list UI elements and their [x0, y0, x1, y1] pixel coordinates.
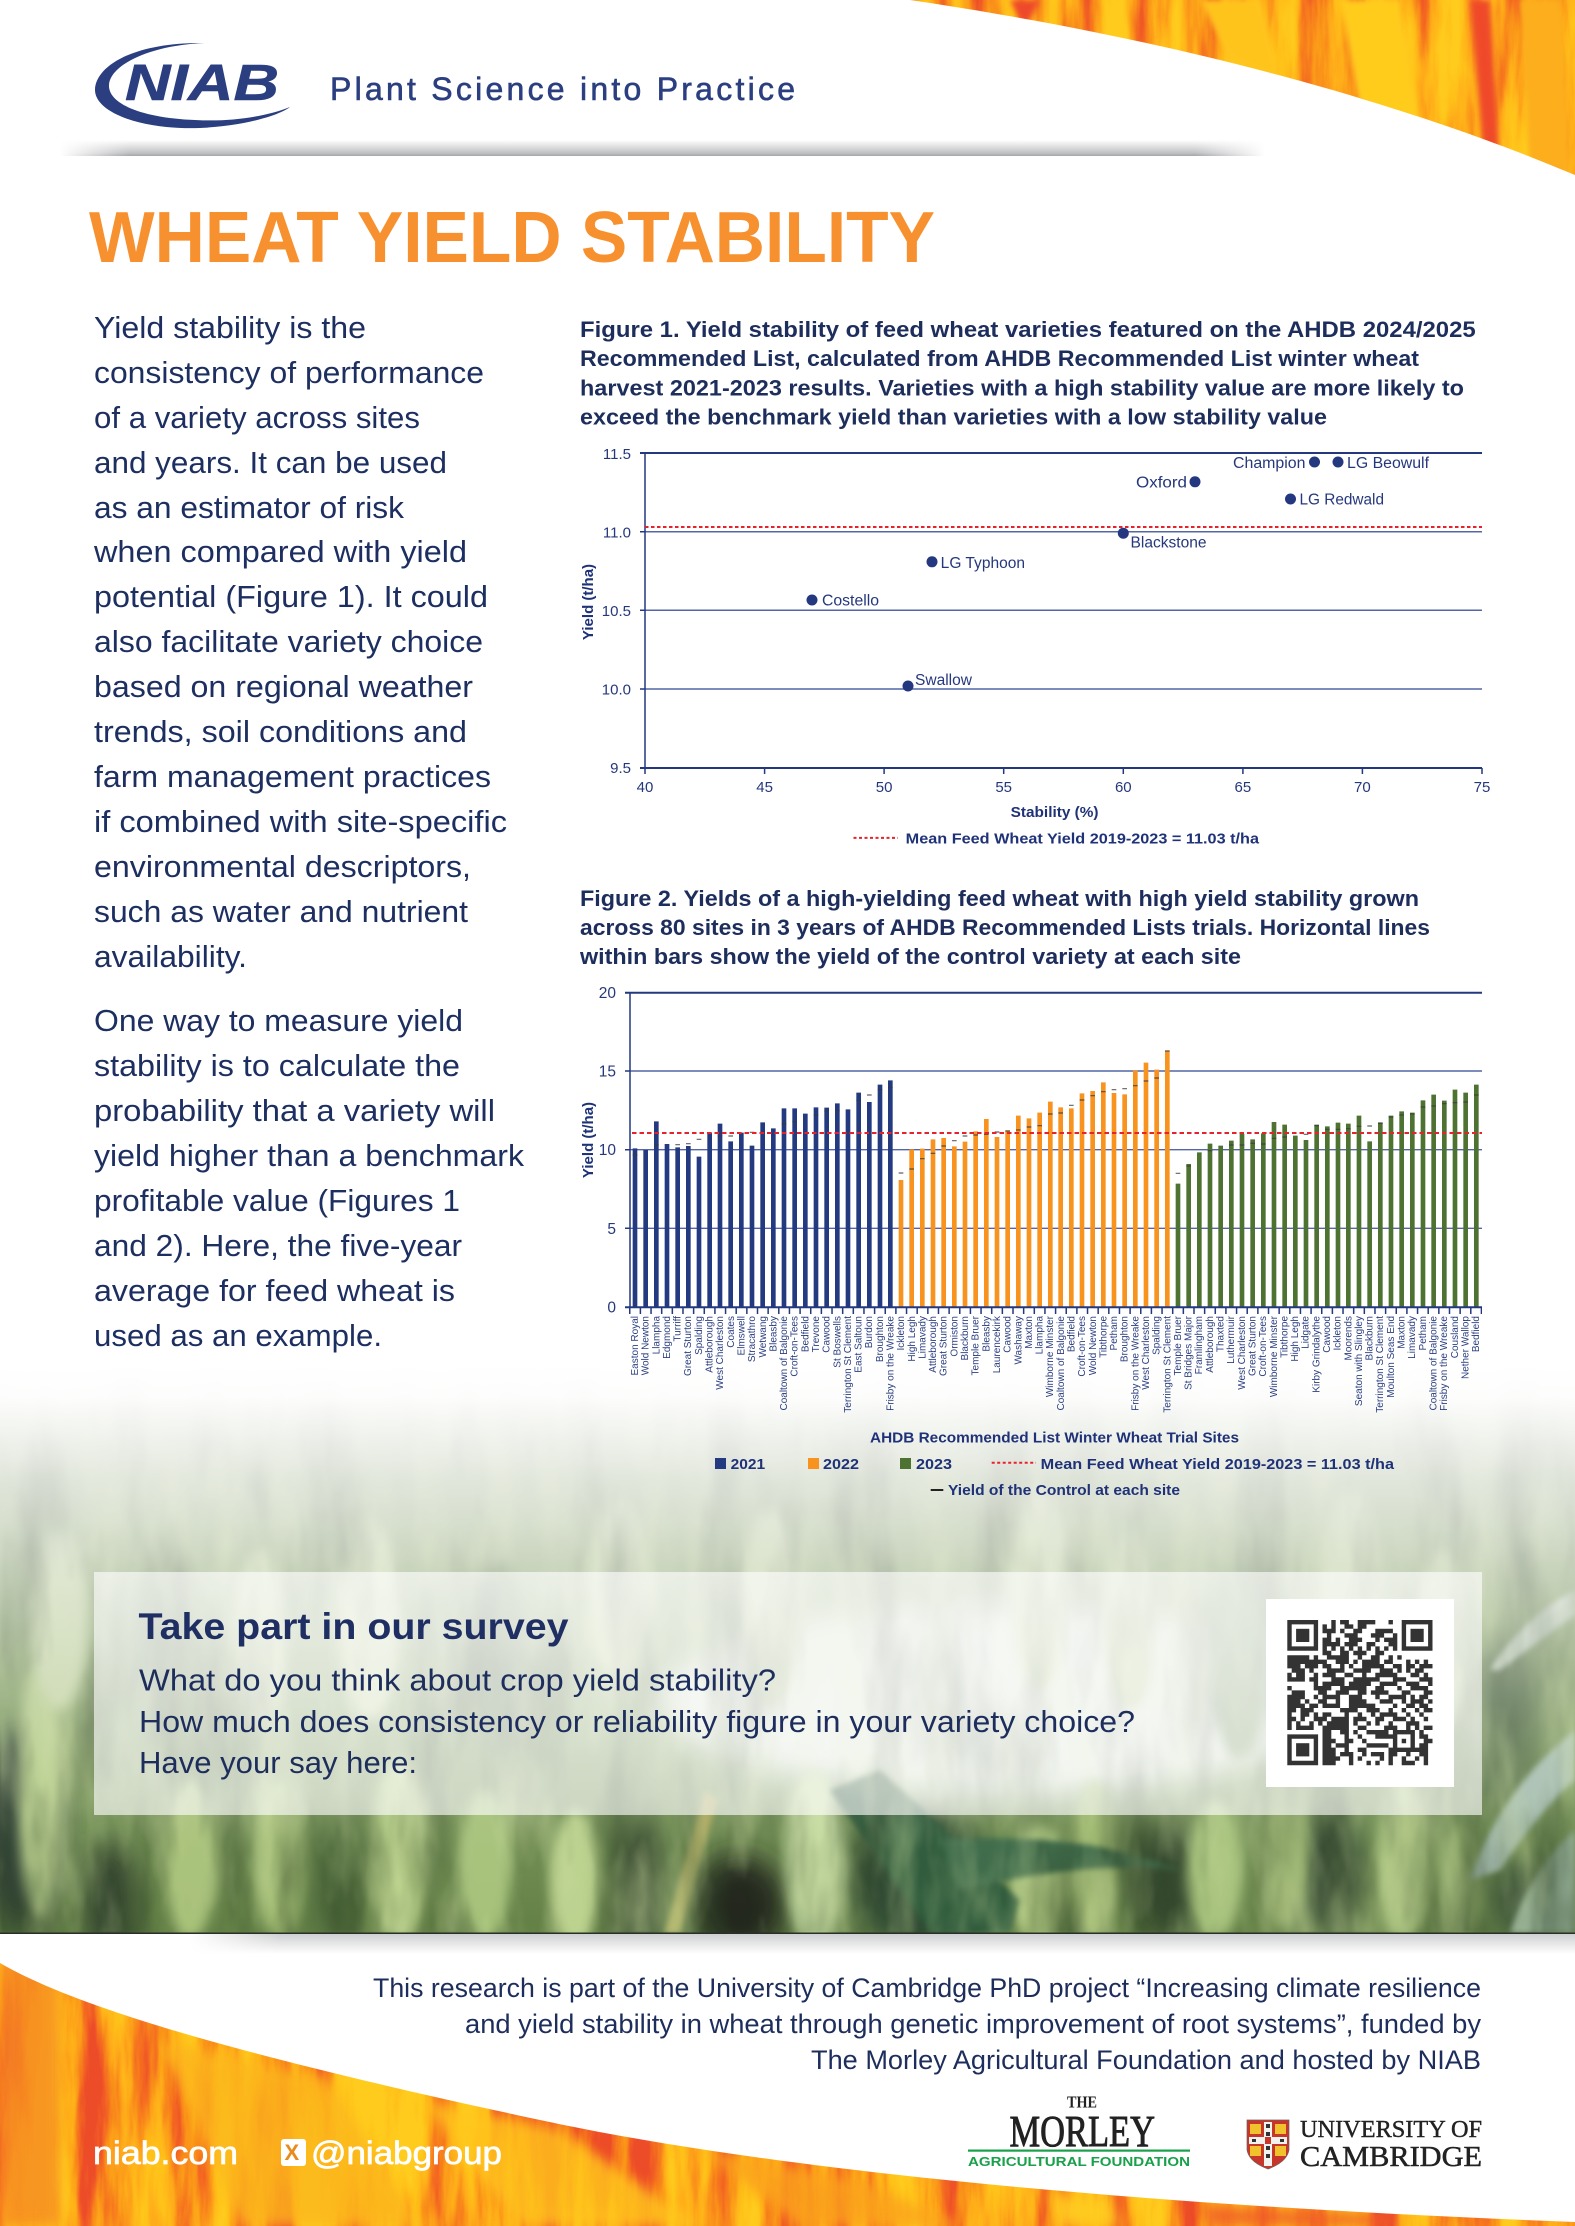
trial site labels: Edgmond [662, 1316, 673, 1359]
trial site labels: Bleasby [768, 1316, 779, 1352]
trial site labels: Great Sturton [939, 1316, 950, 1376]
legend: Yield of the Control at each site [948, 1482, 1180, 1499]
trial site labels: Ormiston [949, 1316, 960, 1357]
data point labels: Blackstone [1130, 534, 1206, 552]
funding statement: and yield stability in wheat through genetic improvement of root systems”, funded by [465, 2009, 1482, 2039]
trial site labels: Coaltown of Balgonie [1056, 1316, 1067, 1411]
bottom-left orange wheat corner [0, 1955, 1575, 2226]
data point labels: Oxford [1136, 474, 1187, 492]
trial site labels: Llampha [1035, 1316, 1046, 1354]
header shadow bar [60, 140, 1265, 156]
trial site labels: Ickleton [1333, 1316, 1344, 1350]
trial site labels: West Charleston [1141, 1316, 1152, 1390]
intro text: paragraph 1: consistency of performance [94, 355, 484, 390]
trial site labels: Croft-on-Tees [790, 1316, 801, 1377]
trial site labels: Cawood [1003, 1316, 1014, 1353]
figure 1 heading: Figure 1. Yield stability of feed wheat varieties featured on the AHDB 2024/2025 [580, 317, 1476, 342]
trial site labels: Coaltown of Balgonie [1428, 1316, 1440, 1411]
trial site labels: Frisby on the Wreake [886, 1316, 896, 1411]
trial site labels: Maxton [1396, 1316, 1408, 1349]
intro text: paragraph 1: as an estimator of risk [94, 490, 405, 525]
data point labels: LG Redwald [1300, 491, 1384, 508]
legend: 2021 [731, 1456, 765, 1473]
wheat field photo band [0, 1405, 1575, 1932]
trial site labels: Burdon [864, 1316, 875, 1348]
figure 2: bar chart [580, 985, 1482, 1499]
y axis tick labels: 10.5 [602, 603, 631, 620]
intro text: paragraph 1: Yield stability is the [94, 310, 366, 345]
x axis tick labels: 50 [876, 779, 892, 796]
trial site labels: Maxton [1024, 1316, 1035, 1349]
trial site labels: Frisby on the Wreake [1439, 1316, 1450, 1411]
funding statement: This research is part of the University of Cambridge PhD project “Increasing climate resilience [373, 1973, 1481, 2003]
trial site labels: Bedfield [1066, 1316, 1078, 1352]
bars and control marks [633, 1051, 1479, 1307]
trial site labels: Cawood [1322, 1316, 1333, 1353]
top-right orange wheat corner [900, 0, 1575, 180]
trial site labels: Spalding [694, 1316, 705, 1355]
trial site labels: Thaxted [1216, 1316, 1226, 1352]
trial site labels: Cawood [822, 1316, 833, 1353]
y axis tick labels: 10 [599, 1142, 616, 1159]
intro text: paragraph 2: stability is to calculate the [94, 1048, 460, 1083]
intro text: paragraph 1 [93, 310, 507, 974]
figure 1 heading: Recommended List, calculated from AHDB Recommended List winter wheat [580, 346, 1420, 371]
trial site labels: Broughton [875, 1316, 886, 1362]
funding statement: The Morley Agricultural Foundation and hosted by NIAB [811, 2045, 1481, 2075]
data point labels: Swallow [915, 672, 973, 689]
intro text: paragraph 1: availability. [94, 939, 247, 974]
trial site labels: Wimborne Minster [1045, 1315, 1056, 1397]
trial site labels: East Saltoun [854, 1316, 865, 1373]
trial site labels: Tibthorpe [1279, 1316, 1290, 1358]
intro text: paragraph 1: if combined with site-specific [94, 804, 507, 839]
trial site labels: Laurencekirk [992, 1315, 1003, 1373]
trial site labels: Croft-on-Tees [1077, 1316, 1088, 1377]
survey text [139, 1662, 1135, 1780]
trial site labels: Attleborough [928, 1316, 939, 1373]
y axis tick labels: 5 [607, 1221, 616, 1238]
trial site labels: Moorends [1343, 1316, 1354, 1360]
intro text: paragraph 1: environmental descriptors, [94, 849, 471, 884]
trial site labels: Seaton with Slingley [1354, 1316, 1365, 1406]
trial site labels: Blackburn [1365, 1316, 1376, 1360]
x axis tick labels: 75 [1474, 779, 1490, 796]
trial site labels: Easton Royal [630, 1316, 641, 1375]
trial site labels: Wold Newton [1088, 1316, 1099, 1375]
y axis title: Yield (t/ha) [580, 1102, 597, 1178]
y axis tick labels: 20 [599, 985, 616, 1002]
intro text: paragraph 2: yield higher than a benchmark [94, 1138, 525, 1173]
control marks [633, 1051, 1479, 1173]
intro text: paragraph 1: farm management practices [94, 759, 491, 794]
intro text: paragraph 2: probability that a variety will [94, 1093, 495, 1128]
data point labels: LG Typhoon [941, 555, 1025, 572]
logo: NIAB [95, 43, 290, 128]
trial site labels: Limavady [1407, 1316, 1418, 1359]
QR code [1266, 1599, 1454, 1787]
trial site labels: Cousland [1450, 1316, 1461, 1358]
y axis title: Yield (t/ha) [580, 564, 597, 640]
trial site labels: Ickleton [896, 1316, 907, 1350]
trial site labels: Attleborough [1205, 1316, 1216, 1373]
trial site labels: Kirby Grindalythe [1311, 1316, 1322, 1393]
data points [806, 456, 1344, 692]
intro text: paragraph 1: when compared with yield [93, 534, 467, 569]
intro text: paragraph 1: also facilitate variety choice [94, 624, 483, 659]
legend [715, 1456, 1395, 1499]
legend: 2023 [916, 1456, 952, 1473]
logo: Morley Agricultural Foundation: MORLEY [1010, 2107, 1155, 2156]
y axis tick labels: 15 [599, 1064, 616, 1081]
figure 2 heading: across 80 sites in 3 years of AHDB Recommended Lists trials. Horizontal lines [580, 915, 1430, 940]
x axis tick labels: 45 [756, 779, 773, 796]
y axis tick labels: 0 [607, 1300, 616, 1317]
bottom band shadow [190, 1934, 1575, 1954]
intro text: paragraph 1: such as water and nutrient [94, 894, 468, 929]
trial site labels [630, 1315, 1482, 1413]
logo: University of Cambridge: UNIVERSITY OF [1300, 2117, 1482, 2143]
data point labels: Champion [1233, 455, 1306, 472]
logo: University of Cambridge: CAMBRIDGE [1300, 2141, 1482, 2173]
trial site labels: Croft-on-Tees [1258, 1316, 1269, 1377]
intro text: paragraph 2: One way to measure yield [94, 1003, 463, 1038]
trial site labels: Temple Bruer [971, 1315, 982, 1375]
legend: Mean Feed Wheat Yield 2019-2023 = 11.03 t/ha [906, 831, 1260, 848]
trial site labels: Terrington St Clement [843, 1316, 854, 1413]
trial site labels: Attleborough [704, 1316, 716, 1373]
intro text: paragraph 1: based on regional weather [94, 669, 473, 704]
trial site labels: Turriff [673, 1316, 684, 1342]
icon: crest [1247, 2120, 1289, 2169]
intro text: paragraph 1: trends, soil conditions and [94, 714, 467, 749]
data point labels: Costello [822, 593, 879, 610]
survey text: What do you think about crop yield stability? [139, 1662, 776, 1698]
trial site labels: Wold Newton [641, 1316, 652, 1375]
tagline: Plant Science into Practice [330, 71, 795, 107]
trial site labels: Terrington St Clement [1162, 1316, 1173, 1413]
website link: niab.com [93, 2135, 238, 2171]
intro text: paragraph 1: potential (Figure 1). It could [94, 579, 488, 614]
x axis title: Stability (%) [1011, 804, 1099, 821]
y axis tick labels [599, 985, 616, 1317]
trial site labels: Nether Wallop [1460, 1316, 1471, 1379]
trial site labels: Frisby on the Wreake [1130, 1316, 1141, 1411]
trial site labels: Tibthorpe [1098, 1316, 1109, 1358]
trial site labels: West Charleston [715, 1316, 726, 1390]
intro text: paragraph 2: average for feed wheat is [94, 1273, 455, 1308]
figure 2 heading: within bars show the yield of the control variety at each site [579, 944, 1241, 969]
trial site labels: Wimborne Minster [1269, 1315, 1280, 1397]
trial site labels: Terrington St Clement [1375, 1316, 1386, 1413]
figure 2 heading [579, 886, 1430, 969]
y axis tick labels: 11.0 [603, 524, 631, 542]
logo: Morley Agricultural Foundation: THE [1067, 2092, 1097, 2112]
intro text: paragraph 2: used as an example. [94, 1318, 382, 1353]
trial site labels: High Legh [907, 1316, 918, 1362]
x axis tick labels: 65 [1235, 779, 1251, 796]
y axis tick labels: 9.5 [610, 760, 631, 777]
trial site labels: Elmswell [736, 1316, 748, 1355]
trial site labels: Petham [1109, 1316, 1120, 1350]
trial site labels: Lidgate [1301, 1316, 1312, 1349]
figure 1 heading: exceed the benchmark yield than varieties with a low stability value [580, 404, 1327, 429]
intro text: paragraph 2: and 2). Here, the five-year [94, 1228, 462, 1263]
trial site labels: West Charleston [1237, 1316, 1248, 1390]
figure 1 heading: harvest 2021-2023 results. Varieties with a high stability value are more likely to [580, 375, 1464, 400]
trial site labels: Framlingham [1194, 1316, 1205, 1374]
trial site labels: Bleasby [981, 1316, 992, 1352]
data point labels [822, 455, 1430, 689]
trial site labels: Coaltown of Balgonie [779, 1316, 790, 1411]
trial site labels: Wetwang [758, 1316, 769, 1358]
trial site labels: Broughton [1120, 1316, 1131, 1362]
social handle: @niabgroup [311, 2135, 502, 2171]
legend: Mean Feed Wheat Yield 2019-2023 = 11.03 t/ha [1041, 1456, 1395, 1473]
title: WHEAT YIELD STABILITY [89, 198, 935, 278]
logo: Morley Agricultural Foundation: AGRICULTURAL FOUNDATION [968, 2154, 1190, 2169]
intro text: paragraph 2 [94, 1003, 525, 1353]
trial site labels: St Bridges Major [1184, 1315, 1195, 1390]
y axis tick labels: 10.0 [602, 682, 631, 699]
funding statement [373, 1973, 1482, 2075]
intro text: paragraph 2: profitable value (Figures 1 [94, 1183, 460, 1218]
trial site labels: Washaway [1013, 1316, 1024, 1365]
x axis tick labels [637, 779, 1490, 796]
trial site labels: Trevone [811, 1316, 822, 1352]
survey text: Have your say here: [139, 1745, 417, 1780]
data point labels: LG Beowulf [1347, 455, 1430, 472]
trial site labels: Luthermuir [1226, 1315, 1237, 1364]
x axis tick labels: 40 [637, 779, 653, 796]
bars 2022 [901, 1051, 1167, 1307]
x axis title: AHDB Recommended List Winter Wheat Trial Sites [870, 1430, 1239, 1447]
y axis tick labels [602, 446, 631, 777]
x axis tick labels: 55 [995, 779, 1012, 796]
intro text: paragraph 1: of a variety across sites [94, 400, 420, 435]
trial site labels: Bedfield [1471, 1316, 1482, 1352]
survey heading: Take part in our survey [138, 1606, 569, 1647]
trial site labels: Great Sturton [683, 1316, 694, 1376]
logo: NIAB: NIAB [125, 54, 279, 111]
trial site labels: Llampha [651, 1316, 662, 1354]
logo: Morley Agricultural Foundation [968, 2092, 1190, 2169]
trial site labels: Bedfield [800, 1316, 811, 1352]
trial site labels: Temple Bruer [1173, 1315, 1184, 1375]
trial site labels: Limavady [917, 1316, 928, 1359]
trial site labels: Coates [726, 1316, 737, 1348]
logo: University of Cambridge [1247, 2117, 1482, 2173]
trial site labels: Moulton Seas End [1386, 1316, 1397, 1398]
trial site labels: Spalding [1152, 1316, 1163, 1355]
y axis tick labels: 11.5 [603, 446, 631, 463]
figure 1 heading [580, 317, 1476, 429]
figure 2 heading: Figure 2. Yields of a high-yielding feed wheat with high yield stability grown [580, 886, 1419, 911]
x axis tick labels: 70 [1354, 779, 1371, 796]
trial site labels: St Boswells [832, 1316, 843, 1368]
intro text: paragraph 1: and years. It can be used [94, 445, 447, 480]
figure 1: scatter chart [580, 446, 1490, 848]
bars 2021 [635, 1080, 890, 1307]
survey panel [94, 1572, 1482, 1815]
bars 2023 [1178, 1085, 1476, 1307]
trial site labels: Petham [1418, 1316, 1429, 1350]
x axis tick labels: 60 [1115, 779, 1132, 796]
trial site labels: Blackburn [960, 1316, 971, 1360]
legend: 2022 [823, 1456, 859, 1473]
social handle: X [284, 2140, 300, 2165]
trial site labels: Stracathro [747, 1316, 758, 1362]
survey text: How much does consistency or reliability figure in your variety choice? [139, 1704, 1135, 1739]
trial site labels: Great Sturton [1248, 1316, 1258, 1376]
trial site labels: High Legh [1290, 1316, 1301, 1362]
